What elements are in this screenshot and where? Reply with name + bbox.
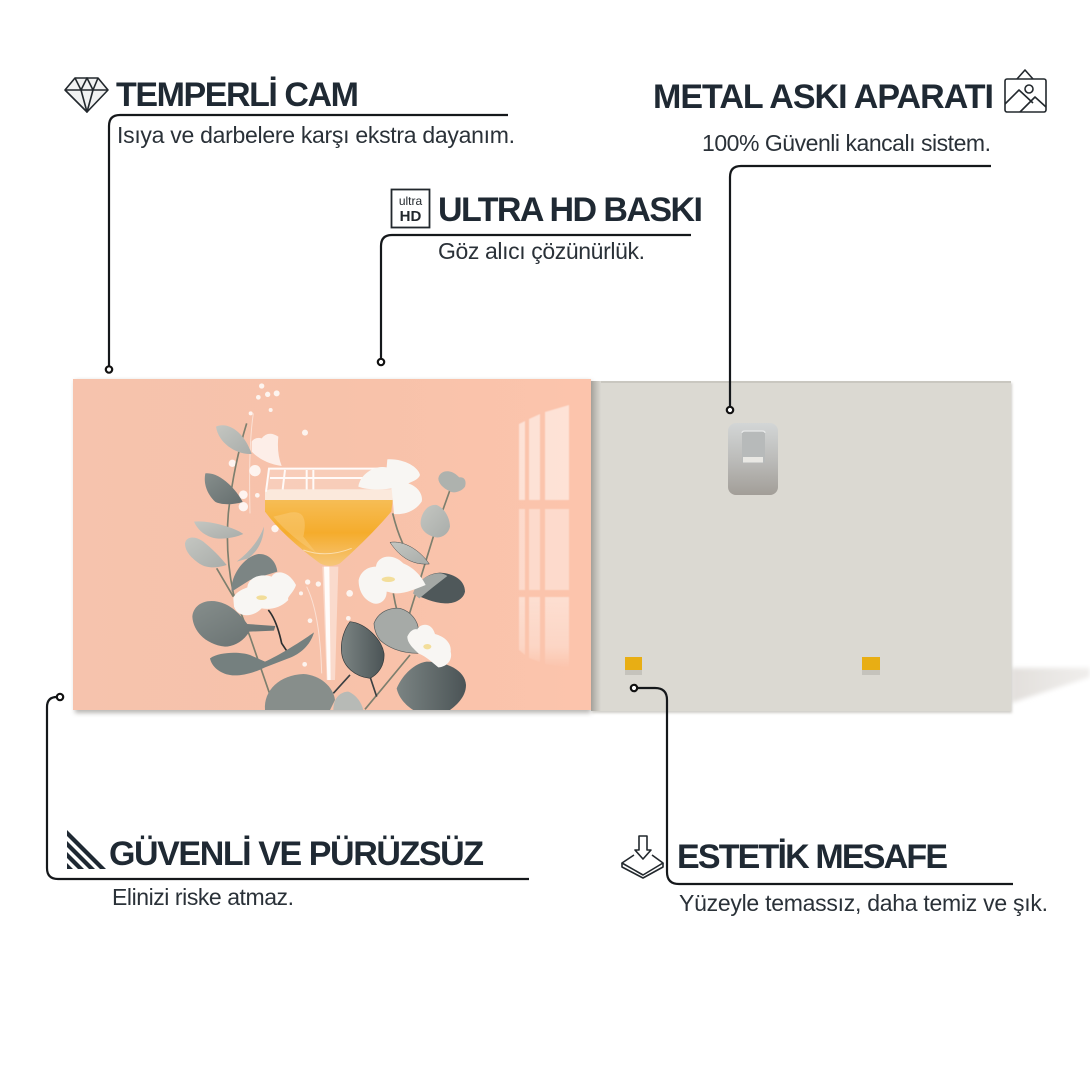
- icon: arrow onto layer: [622, 836, 663, 878]
- callout: ultra hd baskı: [378, 190, 703, 365]
- callout: temperli cam: Isıya ve darbelere karşı ekstra dayanım.: [117, 122, 515, 148]
- callout: ultra hd baskı: Göz alıcı çözünürlük.: [438, 238, 645, 264]
- icon: diagonal stripes: [67, 830, 106, 869]
- callout: estetik mesafe: Yüzeyle temassız, daha temiz ve şık.: [679, 890, 1048, 916]
- icon: diamond: [65, 78, 108, 112]
- white background sprigs: [229, 383, 353, 684]
- callout: estetik mesafe: ESTETİK MESAFE: [677, 838, 948, 876]
- callout: metal askı aparatı: METAL ASKI APARATI: [653, 78, 994, 116]
- flower centres: [256, 577, 431, 649]
- callout: metal askı aparatı: [653, 70, 1046, 413]
- white flowers: [233, 459, 451, 667]
- panel: glass back side: [591, 381, 1090, 713]
- callout: güvenli ve pürüzsüz: [47, 694, 529, 910]
- callout: temperli cam: [65, 76, 515, 373]
- callout: güvenli ve pürüzsüz: GÜVENLİ VE PÜRÜZSÜZ: [109, 835, 484, 873]
- leaves: [185, 425, 466, 710]
- icon: hanging picture: [1005, 70, 1046, 112]
- hanger plate: [728, 423, 778, 495]
- stems: [217, 423, 450, 709]
- cocktail glass: [265, 469, 393, 680]
- panel: glass front artwork: [73, 379, 591, 713]
- callout: güvenli ve pürüzsüz: Elinizi riske atmaz.: [112, 884, 294, 910]
- window reflection: [519, 405, 569, 668]
- callout: metal askı aparatı: 100% Güvenli kancalı sistem.: [702, 130, 991, 156]
- infographic canvas: [46, 69, 1090, 916]
- icon: ultra hd: [392, 190, 430, 228]
- spacer pad right: [862, 657, 880, 675]
- icon: ultra hd: HD: [400, 208, 421, 225]
- spacer pad left: [625, 657, 642, 675]
- icon: ultra hd: ultra: [399, 194, 422, 208]
- illustration: cocktail and eucalyptus: [185, 383, 466, 710]
- callout: ultra hd baskı: ULTRA HD BASKI: [438, 191, 703, 229]
- callout: temperli cam: TEMPERLİ CAM: [116, 76, 359, 114]
- callout: estetik mesafe: [622, 685, 1048, 916]
